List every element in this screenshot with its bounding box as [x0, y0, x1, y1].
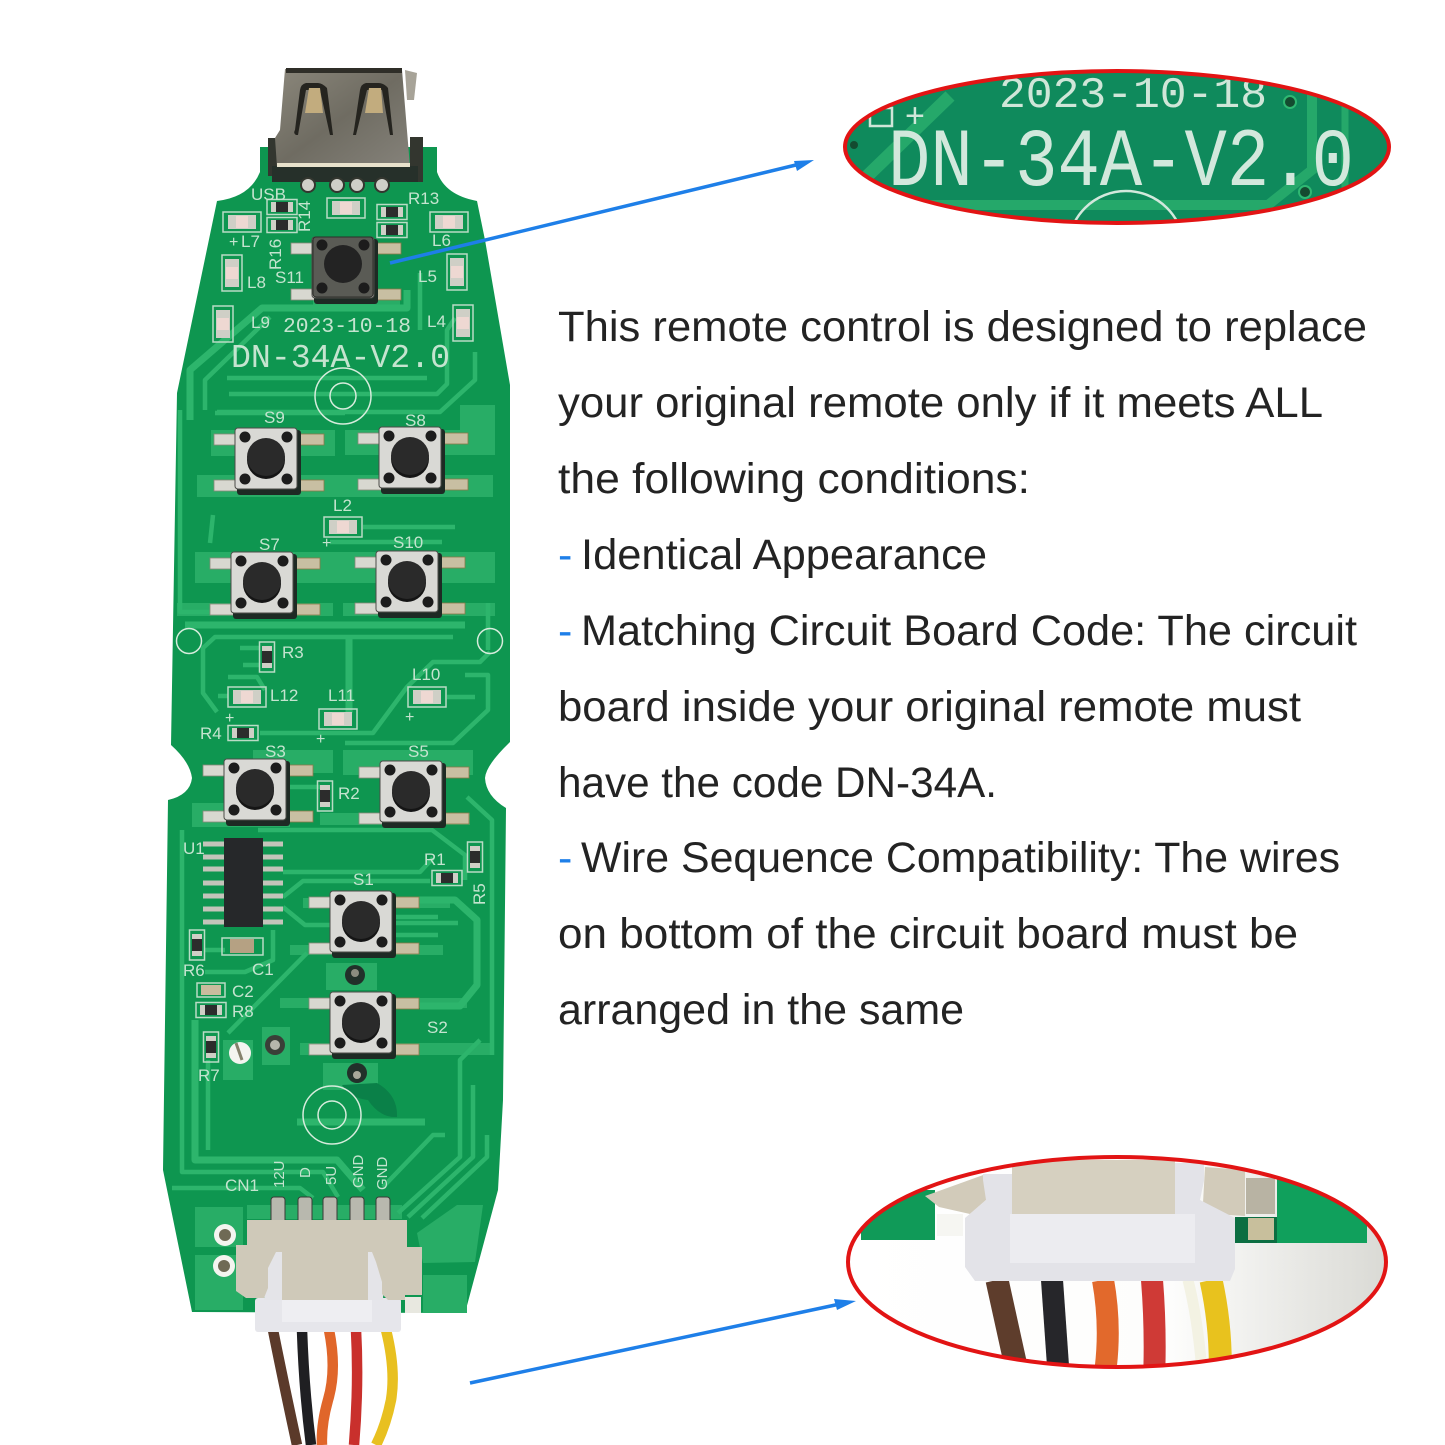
silkscreen labels: R7: [198, 1066, 220, 1085]
silkscreen labels: R5: [470, 883, 489, 905]
silkscreen labels: S8: [405, 411, 426, 430]
silkscreen labels: L4: [427, 312, 446, 331]
silkscreen labels: L11: [328, 686, 355, 705]
text block: compatibility conditions: This remote control is designed to replace: [558, 303, 1367, 351]
silkscreen labels: USB: [251, 185, 286, 204]
callout: circuit board code zoom: DN-34A-V2.0: [888, 116, 1354, 210]
silkscreen labels: S1: [353, 870, 374, 889]
silkscreen labels: +: [322, 535, 331, 552]
silkscreen labels: L10: [412, 665, 440, 684]
text block: compatibility conditions: Identical Appearance: [581, 531, 987, 579]
silkscreen labels: GND: [350, 1154, 367, 1188]
text block: compatibility conditions: -: [558, 531, 572, 579]
silkscreen labels: S10: [393, 533, 423, 552]
silkscreen labels: R16: [266, 239, 285, 270]
silkscreen labels: R8: [232, 1002, 254, 1021]
silkscreen labels: 12U: [271, 1160, 288, 1188]
silkscreen labels: GND: [374, 1156, 391, 1190]
callout: circuit board code zoom: [843, 69, 1391, 225]
text block: compatibility conditions: [558, 303, 1367, 1034]
silkscreen labels: S5: [408, 742, 429, 761]
silkscreen labels: S11: [275, 268, 304, 287]
text block: compatibility conditions: board inside your original remote must: [558, 683, 1301, 731]
mounting hole marks: [176, 368, 502, 1144]
silkscreen labels: DN-34A-V2.0: [231, 340, 450, 377]
text block: compatibility conditions: on bottom of the circuit board must be: [558, 910, 1298, 958]
silkscreen labels: R6: [183, 961, 205, 980]
silkscreen labels: L2: [333, 496, 352, 515]
silkscreen labels: C2: [232, 982, 254, 1001]
silkscreen labels: R3: [282, 643, 304, 662]
silkscreen labels: L12: [270, 686, 298, 705]
solder points: [229, 965, 367, 1083]
silkscreen labels: L6: [432, 231, 451, 250]
tact switches: [203, 237, 469, 1059]
PCB traces and copper plates: [172, 273, 495, 1313]
silkscreen labels: S7: [259, 535, 280, 554]
silkscreen labels: +: [316, 731, 325, 748]
silkscreen labels: 5U: [323, 1166, 340, 1185]
text block: compatibility conditions: -: [558, 834, 572, 882]
silkscreen labels: U1: [183, 839, 205, 858]
silkscreen labels: L8: [247, 273, 266, 292]
silkscreen labels: 2023-10-18: [283, 316, 411, 339]
text block: compatibility conditions: -: [558, 607, 572, 655]
silkscreen labels: R2: [338, 784, 360, 803]
wires: [273, 1330, 393, 1445]
circuit board photo: [163, 68, 510, 1445]
callout: circuit board code zoom: +: [905, 97, 925, 135]
text block: compatibility conditions: arranged in the same: [558, 986, 964, 1034]
silkscreen labels: +: [405, 709, 414, 726]
callout: circuit board code zoom: 2023-10-18: [999, 71, 1267, 121]
silkscreen labels: +: [229, 234, 238, 251]
silkscreen labels: L7: [241, 232, 260, 251]
text block: compatibility conditions: the following conditions:: [558, 455, 1030, 503]
silkscreen labels: S9: [264, 408, 285, 427]
PCB outline: [163, 147, 510, 1313]
silkscreen labels: R13: [408, 189, 439, 208]
silkscreen labels: R14: [295, 201, 314, 232]
silkscreen labels: D: [297, 1167, 314, 1178]
silkscreen labels: +: [225, 710, 234, 727]
silkscreen labels: R4: [200, 724, 222, 743]
LEDs and resistors: [190, 198, 482, 1062]
arrow: to wire sequence: [470, 1299, 856, 1383]
connector: [213, 1197, 422, 1332]
silkscreen labels: C1: [252, 960, 274, 979]
silkscreen labels: L9: [251, 313, 270, 332]
text block: compatibility conditions: Wire Sequence Compatibility: The wires: [581, 834, 1340, 882]
silkscreen labels: S3: [265, 742, 286, 761]
glue and repair marks: [342, 1083, 397, 1117]
silkscreen labels: S2: [427, 1018, 448, 1037]
IC U1: [203, 838, 283, 927]
callout: wire sequence zoom: [845, 1150, 1390, 1380]
arrow: to board code: [390, 160, 814, 263]
silkscreen labels: L5: [418, 267, 437, 286]
text block: compatibility conditions: your original remote only if it meets ALL: [558, 379, 1323, 427]
silkscreen labels: R1: [424, 850, 446, 869]
silkscreen labels: [183, 185, 489, 1195]
text block: compatibility conditions: Matching Circuit Board Code: The circuit: [581, 607, 1357, 655]
USB port: [268, 68, 423, 192]
silkscreen labels: CN1: [225, 1176, 259, 1195]
text block: compatibility conditions: have the code DN-34A.: [558, 759, 997, 807]
